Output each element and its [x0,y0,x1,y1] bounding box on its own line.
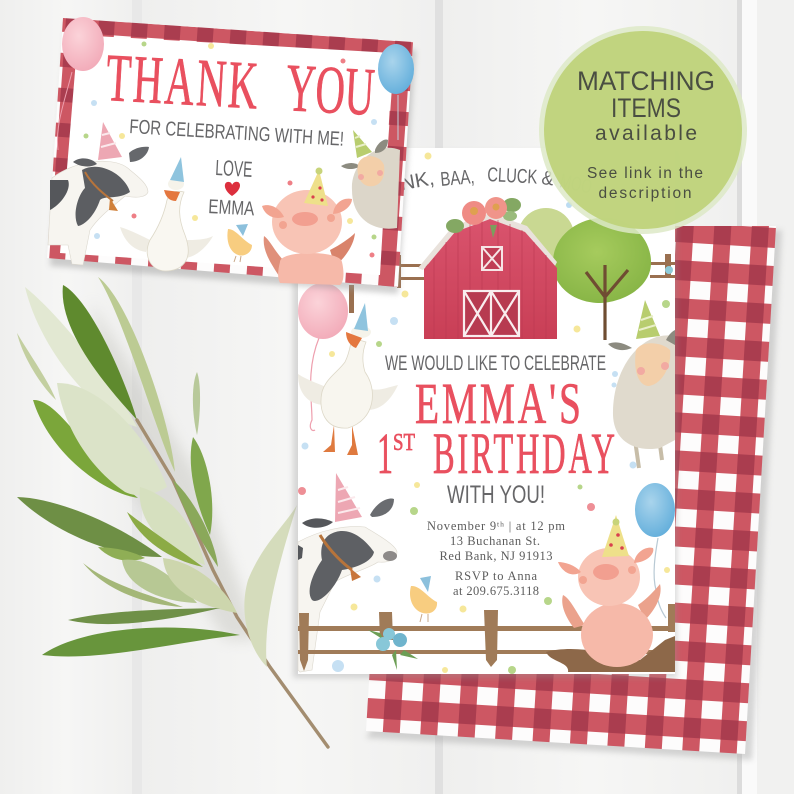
badge text: description: description [598,185,692,202]
subheading: for celebrating: FOR CELEBRATING WITH ME! [129,116,345,151]
gingham card shadow [366,230,782,760]
olive branch [17,277,328,747]
icon: back tree [518,208,574,264]
curved heading: farm sounds: & [540,167,556,190]
leaf 8 [191,437,212,535]
panel: thank-you card [47,17,414,287]
heading: we would like to celebrate: WE WOULD LIKE TO CELEBRATE [385,352,606,375]
leaf 14 [163,558,237,613]
leaf 16 [68,608,220,624]
badge: matching items [539,26,747,234]
icon: chick with party hat [410,576,437,622]
leaf 11 [17,497,162,557]
icon: pink balloon [57,17,104,150]
leaf 5 [57,383,167,495]
back fence [349,254,675,313]
text: love: LOVE [215,155,253,182]
leaf 17 [42,628,240,656]
badge heading: matching: MATCHING [577,66,715,96]
heading: Emma's: EMMA'S [415,372,581,436]
leaf 6 [33,400,138,498]
event details: Red Bank, NJ 91913 [440,549,552,563]
icon: heart [225,182,240,196]
icon: pink balloon [298,283,348,431]
leaf 12 [98,547,145,561]
leaf 3 [17,333,56,400]
foreground wooden fence [298,604,675,671]
curved heading: farm sounds: CLUCK [487,164,538,189]
icon: cow with party hat [298,473,397,672]
heading: thank you: THANK [104,41,260,124]
barn door [464,291,519,336]
icon: blue flowers on fence [368,628,418,670]
invitation shadow [293,152,677,678]
icon: front tree [553,218,651,340]
confetti dots [298,152,670,674]
icon: sheep with party hat [608,300,675,468]
icon: pig with party hat in mud [546,515,675,672]
heading: 1st birthday: 1 [377,421,393,486]
event details: November 9ᵗʰ | at 12 pm [427,519,565,533]
heading: with you: WITH YOU! [447,481,545,509]
heading: 1st birthday: BIRTHDAY [433,422,615,487]
panel: birthday invitation [298,148,675,674]
badge heading: items: ITEMS [611,93,681,123]
roof flowers [446,197,521,238]
olive branch shadow [90,300,260,640]
confetti dots [84,42,377,258]
curved heading: farm sounds [377,164,594,199]
leaf 1 [25,287,137,427]
thank-you card shadow [50,24,416,294]
panel: red gingham back card [366,226,776,754]
badge text: available: available [595,122,697,145]
icon: sheep with party hat [341,130,400,229]
heading: 1st birthday: ST [393,430,415,456]
icon: blue balloon [635,483,675,618]
icon: goose with party hat [120,157,213,271]
icon: red barn [418,197,557,339]
stem [137,420,328,747]
icon: cow with party hat [48,122,149,265]
icon: blue balloon [378,44,414,140]
barn window [482,247,502,270]
curved heading: farm sounds: OINK, [377,168,436,199]
leaf 18 [244,505,297,667]
leaf 19 [173,480,218,567]
leaf 4 [98,277,175,472]
icon: blue fence flower [665,266,673,274]
leaf 10 [127,512,203,567]
event details [427,519,565,598]
curved heading: farm sounds: BAA, [440,166,475,191]
icon: goose with party hat [298,303,398,455]
icon: pig with party hat [262,168,355,285]
leaf 15 [83,563,183,607]
curved heading: farm sounds: MOO [558,170,594,199]
heading: thank you: YOU [284,51,376,131]
leaf 13 [122,560,197,603]
event details: 13 Buchanan St. [450,534,540,548]
icon: chick with party hat [227,224,252,262]
event details: at 209.675.3118 [453,584,539,598]
event details: RSVP to Anna [455,569,537,583]
leaf 2 [63,285,137,420]
text: Emma: EMMA [208,196,255,220]
heading: thank you [104,41,376,131]
leaf 9 [140,487,205,565]
leaf 7 [193,372,200,435]
badge text: see link: See link in the [587,165,703,182]
